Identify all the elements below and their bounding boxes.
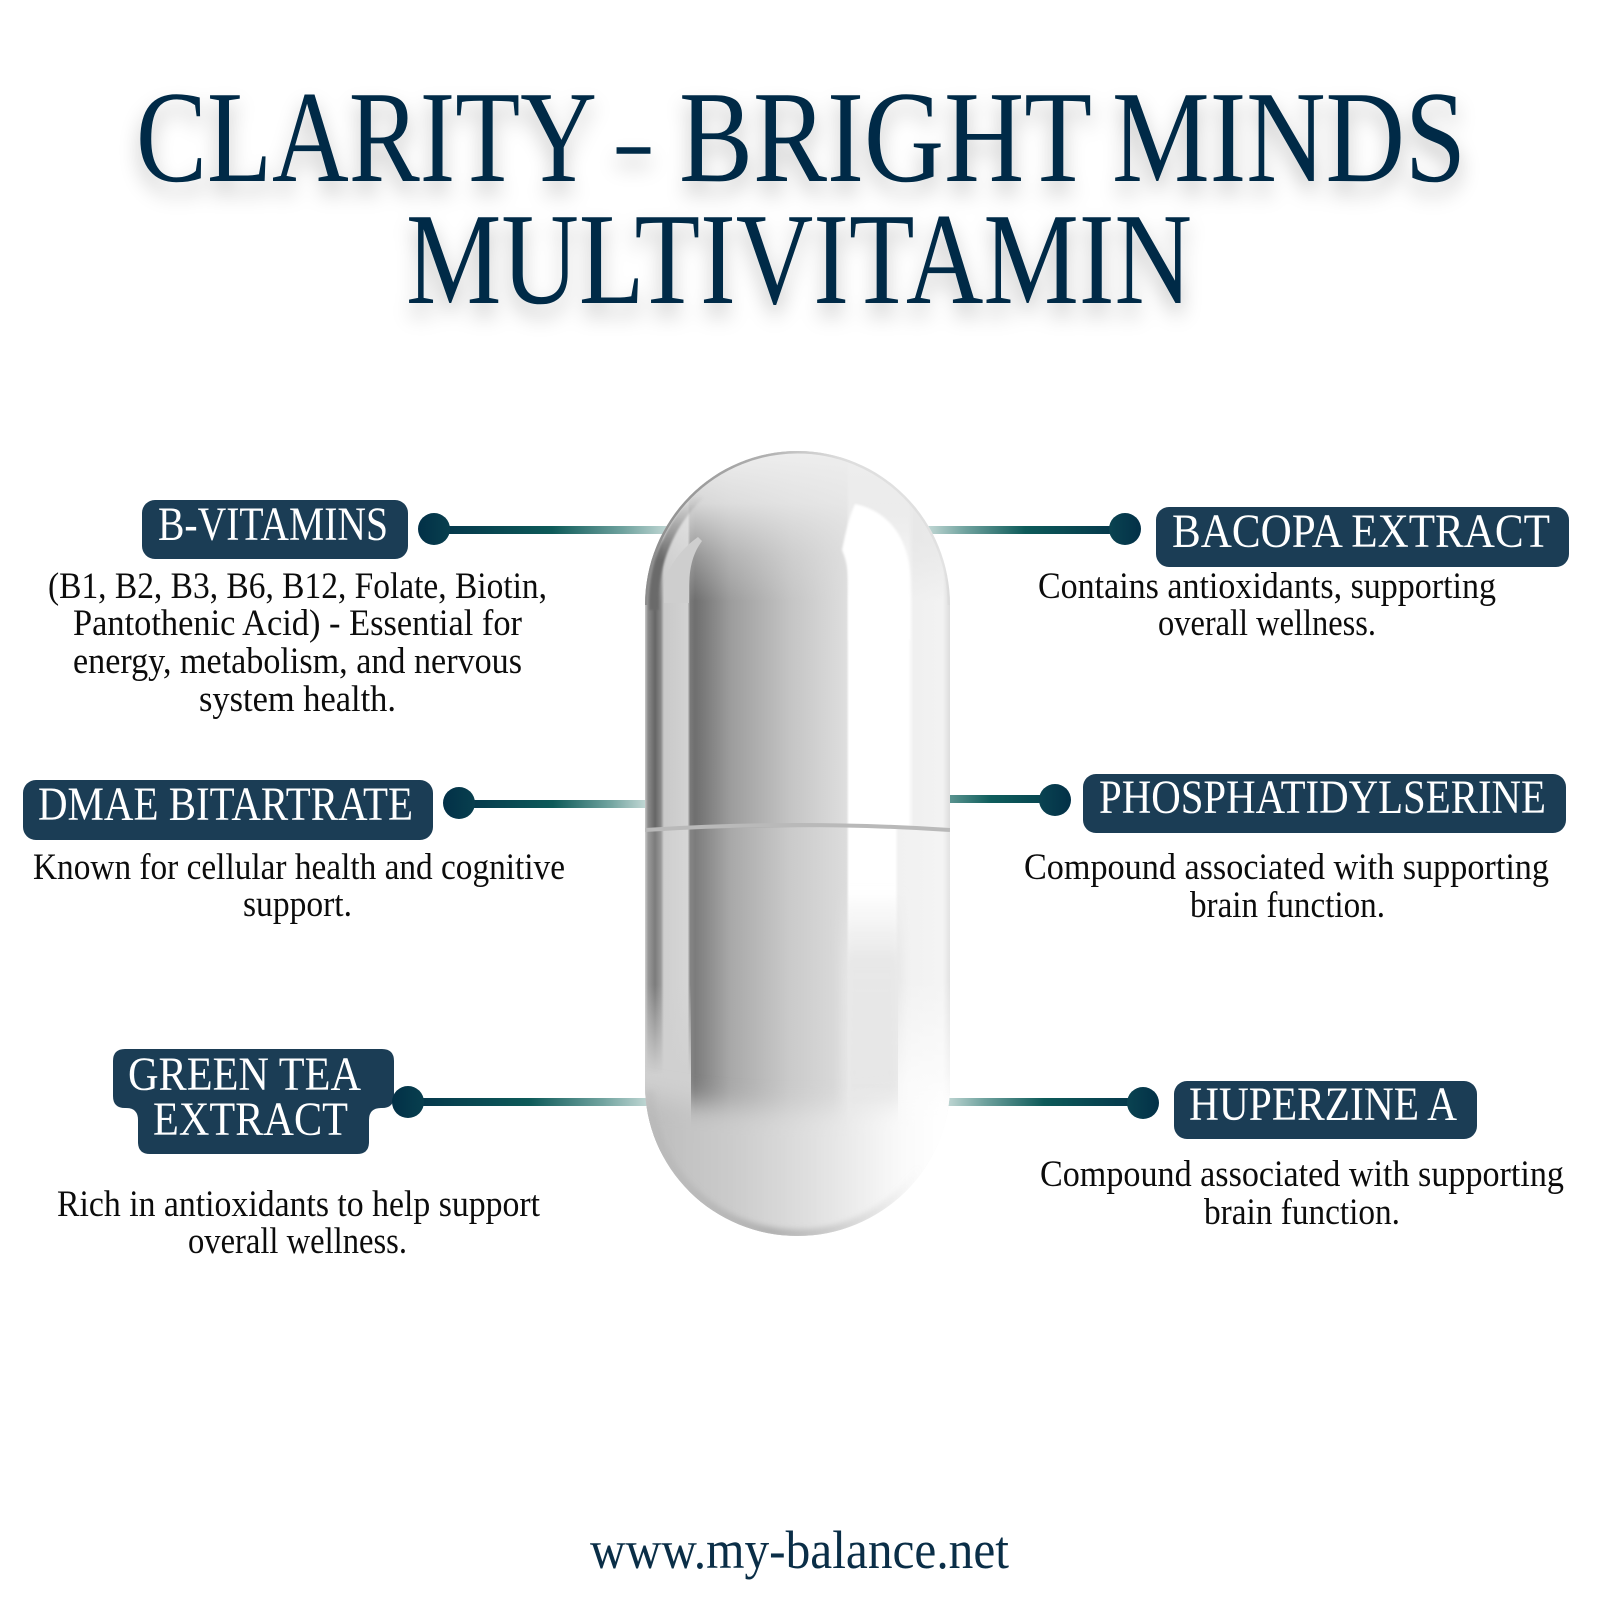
title line 1 bbox=[136, 65, 1466, 210]
top dome shading bbox=[648, 451, 932, 592]
description: Phosphatidylserine: Compound associated with supporting bbox=[1024, 847, 1549, 888]
capsule upper half bbox=[645, 451, 950, 831]
thin rim along top bbox=[646, 452, 949, 605]
connector lines bbox=[408, 526, 1143, 1106]
tag: Green Tea Extract bbox=[113, 1048, 394, 1154]
dot: Bacopa Extract bbox=[1109, 513, 1141, 545]
callout: Phosphatidylserine bbox=[1024, 771, 1566, 926]
tag: Green Tea Extract: GREEN TEA bbox=[128, 1048, 361, 1101]
title line 1: CLARITY bbox=[136, 65, 597, 210]
description: B-Vitamins: Pantothenic Acid) - Essential for bbox=[73, 603, 522, 644]
website footer: www.my-balance.net bbox=[590, 1520, 1009, 1580]
callout: Huperzine A bbox=[1040, 1078, 1564, 1233]
description: B-Vitamins: system health. bbox=[199, 679, 396, 720]
dot: Green Tea Extract bbox=[392, 1086, 424, 1118]
capsule lower half bbox=[645, 828, 950, 1240]
right edge fade bbox=[898, 1026, 950, 1104]
description: Bacopa Extract: overall wellness. bbox=[1158, 603, 1376, 644]
left highlight band bbox=[682, 537, 702, 603]
callout: Bacopa Extract bbox=[1038, 505, 1569, 644]
callout: B-Vitamins bbox=[48, 498, 547, 720]
connector: Green Tea Extract bbox=[408, 1098, 650, 1106]
description: B-Vitamins bbox=[48, 566, 547, 720]
title bbox=[136, 65, 1466, 332]
description: DMAE Bitartrate: support. bbox=[243, 884, 352, 925]
connector: DMAE Bitartrate bbox=[459, 800, 647, 808]
tag: Bacopa Extract: BACOPA EXTRACT bbox=[1172, 505, 1550, 558]
seam between capsule halves bbox=[645, 825, 950, 830]
dot: B-Vitamins bbox=[418, 513, 450, 545]
callout: DMAE Bitartrate bbox=[23, 778, 565, 925]
description: Phosphatidylserine: brain function. bbox=[1190, 885, 1385, 926]
callout: Green Tea Extract bbox=[57, 1048, 541, 1262]
connector: B-Vitamins bbox=[434, 526, 670, 534]
title line 1: MINDS bbox=[1112, 65, 1466, 210]
tag: DMAE Bitartrate: DMAE BITARTRATE bbox=[38, 778, 413, 831]
dark rim on upper left bbox=[654, 495, 700, 610]
tag: Green Tea Extract: EXTRACT bbox=[153, 1093, 348, 1146]
connector: Bacopa Extract bbox=[926, 526, 1125, 534]
bottom dome shading bbox=[646, 1088, 950, 1232]
description: B-Vitamins: (B1, B2, B3, B6, B12, Folate, Biotin, bbox=[48, 566, 547, 607]
description: Phosphatidylserine bbox=[1024, 847, 1549, 926]
description: Green Tea Extract: Rich in antioxidants to help support bbox=[57, 1184, 541, 1225]
title line 1: – bbox=[616, 65, 651, 210]
left strip fade bbox=[645, 994, 691, 1116]
description: DMAE Bitartrate: Known for cellular health and cognitive bbox=[33, 847, 565, 888]
description: Huperzine A: Compound associated with supporting bbox=[1040, 1154, 1564, 1195]
lower highlight fade bbox=[845, 916, 899, 1112]
bottom edge shadow bbox=[682, 1180, 894, 1236]
dot: Huperzine A bbox=[1127, 1087, 1159, 1119]
title line 2: MULTIVITAMIN bbox=[406, 187, 1192, 332]
tag: Huperzine A: HUPERZINE A bbox=[1189, 1078, 1457, 1131]
connector: Huperzine A bbox=[945, 1098, 1143, 1106]
description: Bacopa Extract bbox=[1038, 566, 1496, 644]
description: Huperzine A: brain function. bbox=[1204, 1192, 1400, 1233]
connector: Phosphatidylserine bbox=[948, 795, 1055, 803]
title line 1: BRIGHT bbox=[679, 65, 1092, 210]
description: DMAE Bitartrate bbox=[33, 847, 565, 925]
description: Green Tea Extract bbox=[57, 1184, 541, 1262]
description: Huperzine A bbox=[1040, 1154, 1564, 1233]
tag: B-Vitamins: B-VITAMINS bbox=[158, 498, 388, 551]
white highlight, upper right bbox=[842, 504, 908, 574]
capsule illustration bbox=[645, 451, 950, 1236]
dot: Phosphatidylserine bbox=[1039, 784, 1071, 816]
description: B-Vitamins: energy, metabolism, and nervous bbox=[73, 641, 522, 682]
description: Green Tea Extract: overall wellness. bbox=[188, 1221, 407, 1262]
dot: DMAE Bitartrate bbox=[443, 787, 475, 819]
description: Bacopa Extract: Contains antioxidants, supporting bbox=[1038, 566, 1496, 607]
